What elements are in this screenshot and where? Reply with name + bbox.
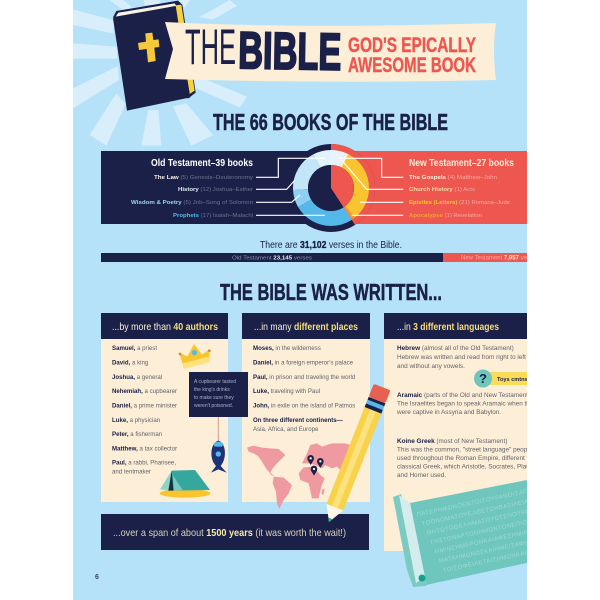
authors header: ...by more than 40 authors — [112, 322, 218, 333]
places list: On three different continents— — [253, 417, 344, 424]
scroll lettering: ΤΟΙΣΟΦΕΙΛΕΤΑΙΣΗΜΩΝΚΑΙΜΗ — [443, 548, 537, 574]
panel: bottom time span: ...over a span of about 1500 years (it was worth the wait!) — [113, 527, 346, 539]
new testament legend: Epistles (Letters) (21) Romans–Jude — [409, 200, 510, 206]
places list: John, in exile on the island of Patmos — [253, 402, 355, 410]
panel: food tester callout: the king's drinks — [194, 387, 230, 393]
places list: Asia, Africa, and Europe — [253, 426, 319, 433]
verses bar: New Testament 7,957 verses — [461, 256, 538, 262]
scroll lettering: ΤΟΟΝΟΜΑΣΟΥΕΛΘΕΤΩΗΒΑΣΙΛΕΙΑΣΟΥΓΕΝΗ — [421, 493, 560, 528]
hebrew text: Hebrew was written and read from right to left — [397, 354, 526, 361]
old testament legend: Prophets (17) Isaiah–Malachi — [173, 213, 253, 219]
aramaic text: The Israelites began to speak Aramaic when they — [397, 400, 537, 408]
panel: food tester callout — [189, 372, 248, 417]
donut chart — [287, 144, 375, 232]
old testament legend: The Law (5) Genesis–Deuteronomy — [154, 175, 253, 181]
heading: 66 books: THE 66 BOOKS OF THE BIBLE — [213, 109, 448, 135]
title: The Bible: THE — [185, 19, 236, 75]
places list: Daniel, in a foreign emperor's palace — [253, 360, 354, 366]
title banner — [165, 19, 496, 82]
places header: ...in many different places — [254, 322, 358, 333]
scroll lettering: ΠΑΤΕΡΗΜΩΝΟΕΝΤΟΙΣΟΥΡΑΝΟΙΣΑΓΙΑΣΘΗΤΩ — [416, 483, 556, 518]
authors list: and tentmaker — [112, 468, 151, 476]
scroll lettering: ΓΗΣΤΟΝΑΡΤΟΝΗΜΩΝΤΟΝΕΠΙΟΥΣΙΟΝΔΟΣ — [430, 513, 561, 546]
scroll lettering: ΗΜΙΝΣΗΜΕΡΟΝΚΑΙΑΦΕΣΗΜΙΝΤΑΟΦΕΙΛΗ — [434, 523, 562, 556]
koine greek text: classical Greek, which Aristotle, Socrates, Plato, — [397, 464, 534, 470]
panel: places — [242, 313, 370, 502]
koine greek text: This was the common, "street language" people — [397, 446, 533, 454]
old testament legend — [131, 157, 253, 219]
panel: bottom time span — [101, 514, 369, 550]
title: The Bible — [185, 19, 342, 82]
old testament legend: Old Testament–39 books — [151, 157, 253, 169]
aramaic text: Aramaic (parts of the Old and New Testaments) — [397, 392, 533, 399]
icon: crown — [179, 344, 211, 369]
icon: hanging fish — [211, 417, 227, 473]
old testament legend: Wisdom & Poetry (5) Job–Song of Solomon — [131, 200, 253, 206]
subtitle — [348, 34, 476, 77]
old testament legend: History (12) Joshua–Esther — [178, 187, 253, 193]
panel: books chart — [101, 144, 527, 232]
authors list — [112, 345, 177, 476]
icon: Bible book — [113, 1, 196, 111]
new testament legend: Church History (1) Acts — [409, 187, 475, 193]
authors list: Joshua, a general — [112, 374, 162, 381]
subtitle: GOD'S EPICALLY — [348, 34, 476, 57]
authors list: Samuel, a priest — [112, 345, 157, 352]
page background — [73, 0, 527, 600]
koine greek text: used throughout the Roman Empire, different from — [397, 455, 539, 462]
hebrew text: Hebrew (almost all of the Old Testament) — [397, 345, 514, 352]
authors list: Peter, a fisherman — [112, 431, 162, 438]
scroll lettering — [417, 489, 527, 572]
aramaic text — [396, 392, 537, 416]
new testament legend: New Testament–27 books — [409, 157, 514, 169]
icon: pencil — [321, 384, 391, 525]
panel: food tester callout: to make sure they — [194, 395, 234, 401]
koine greek text: and Homer used. — [397, 472, 446, 479]
authors list: Daniel, a prime minister — [112, 402, 177, 410]
hebrew text — [397, 345, 526, 370]
authors list: Matthew, a tax collector — [112, 446, 177, 452]
panel: food tester callout: weren't poisoned. — [194, 403, 233, 409]
authors list: Nehemiah, a cupbearer — [112, 388, 177, 395]
panel: languages — [384, 313, 539, 551]
languages header: ...in 3 different languages — [397, 322, 499, 333]
world map — [247, 443, 350, 509]
verses bar — [101, 253, 538, 262]
authors list: David, a king — [112, 360, 148, 366]
new testament legend — [409, 157, 514, 219]
places list: Luke, traveling with Paul — [253, 388, 320, 395]
places list: Paul, in prison and traveling the world — [253, 374, 355, 381]
koine greek text: Koine Greek (most of New Testament) — [397, 438, 507, 445]
scroll lettering: ΘΗΤΩΤΟΘΕΛΗΜΑΣΟΥΩΣΕΝΟΥΡΑΝΩΚΑΙΕΠΙ — [426, 502, 561, 537]
callout: toy: ? — [479, 371, 487, 386]
callout: toy: Toys cmtns — [497, 377, 528, 383]
panel: authors — [101, 313, 228, 502]
heading: written: THE BIBLE WAS WRITTEN... — [220, 279, 442, 305]
leader lines — [256, 158, 403, 215]
subtitle: AWESOME BOOK — [348, 54, 476, 77]
page number: 6 — [95, 574, 99, 581]
verses bar: Old Testament 23,145 verses — [232, 256, 313, 262]
authors list: Paul, a rabbi, Pharisee, — [112, 460, 176, 466]
aramaic text: were captive in Assyria and Babylon. — [396, 409, 501, 416]
scroll lettering: ΜΑΤΑΗΜΩΝΩΣΚΑΙΗΜΕΙΣΑΦΗΚΑΜΕΝ — [439, 535, 552, 565]
places list: Moses, in the wilderness — [253, 345, 321, 352]
icon: cross — [138, 33, 159, 62]
sunburst rays — [73, 0, 247, 146]
callout: toy — [474, 370, 533, 388]
icon: tent — [160, 470, 210, 498]
title: The Bible: BIBLE — [238, 22, 342, 82]
new testament legend: Apocalypse (1) Revelation — [409, 213, 482, 219]
places list — [253, 345, 355, 433]
map pins — [307, 455, 324, 476]
panel: food tester callout: A cupbearer tasted — [194, 379, 236, 385]
authors list: Luke, a physician — [112, 417, 160, 424]
icon: scroll — [393, 480, 527, 587]
hebrew text: and without any vowels. — [397, 363, 465, 370]
koine greek text — [397, 438, 539, 479]
verses statement: There are 31,102 verses in the Bible. — [260, 239, 402, 251]
new testament legend: The Gospels (4) Matthew–John — [409, 175, 497, 181]
